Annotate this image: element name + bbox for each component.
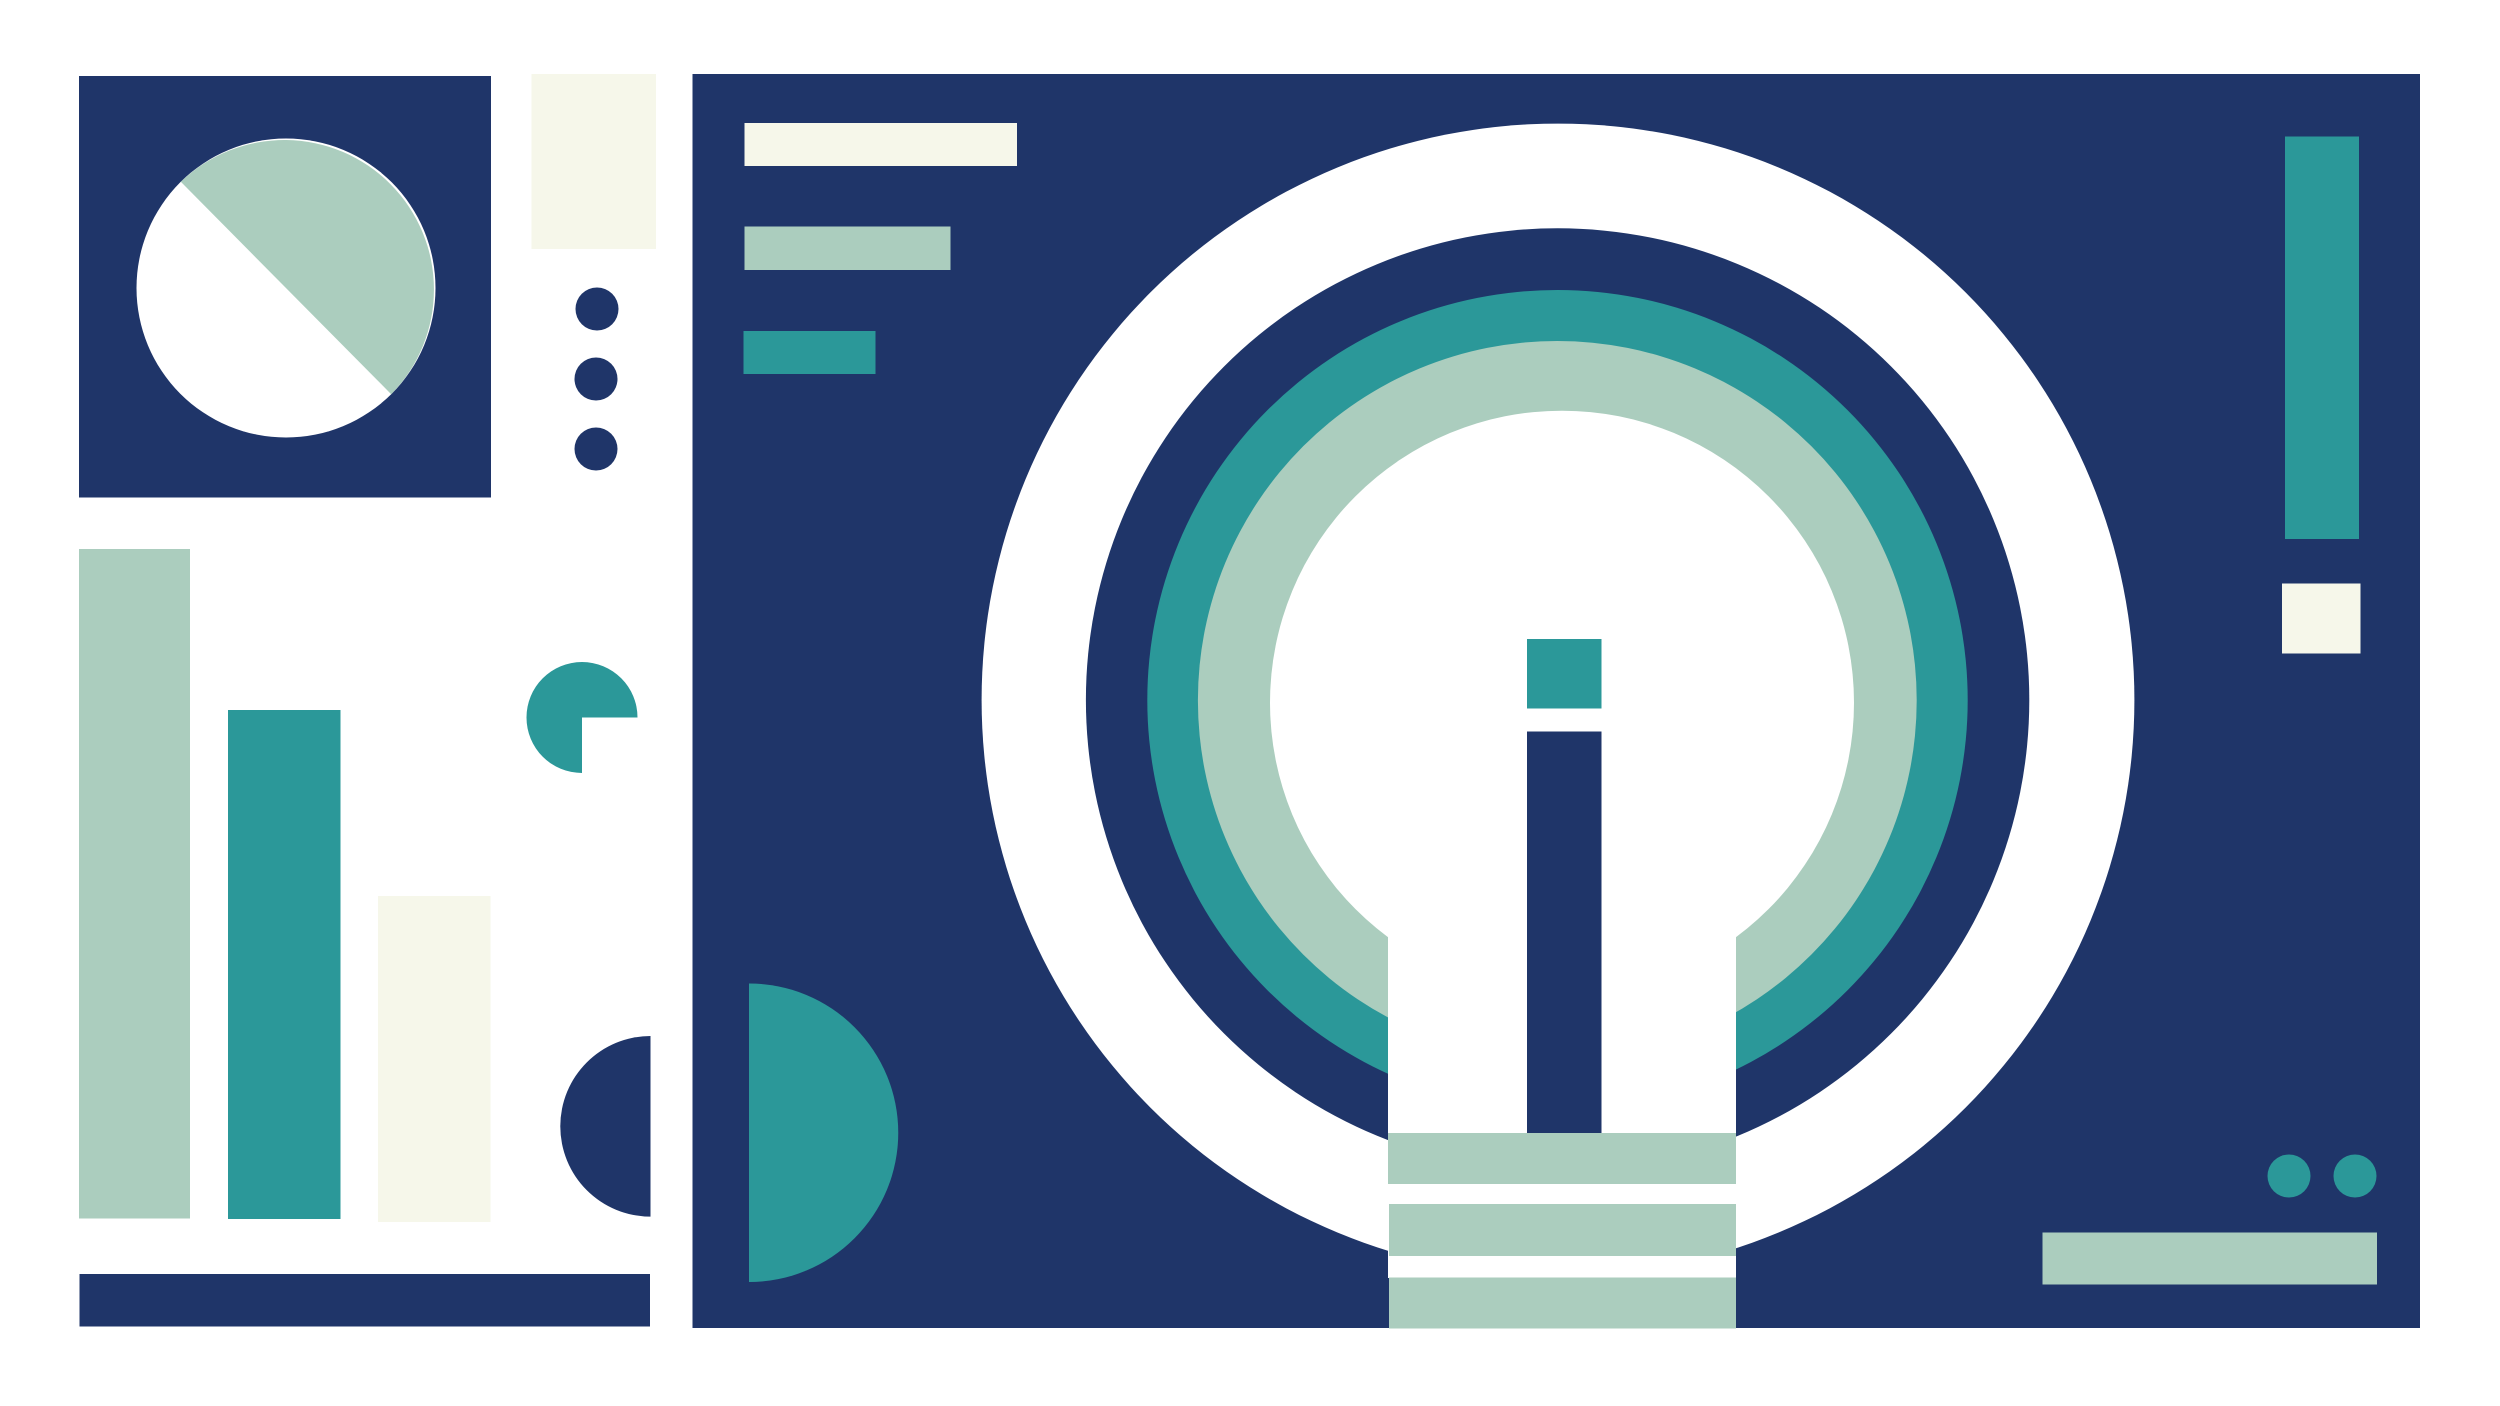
green rectangle bottom right xyxy=(2042,1232,2377,1284)
panel: navy square with split circle xyxy=(79,76,491,498)
circle white half xyxy=(136,138,436,438)
light bulb xyxy=(982,124,2134,1328)
filament dot xyxy=(1527,639,1602,708)
outer white ring xyxy=(982,124,2134,1276)
bar: green xyxy=(79,549,190,1218)
cream square xyxy=(2282,584,2360,654)
bulb base band 2 xyxy=(1389,1204,1736,1256)
filament stem xyxy=(1527,732,1602,1134)
bar: cream xyxy=(378,896,490,1222)
bulb base band 1 xyxy=(1388,1133,1736,1184)
bulb base band 3 xyxy=(1389,1278,1736,1328)
panel: main navy panel xyxy=(692,74,2420,1328)
cream legend bar xyxy=(744,123,1017,166)
white bulb neck xyxy=(1388,936,1736,1278)
teal ring xyxy=(1147,290,1968,1110)
green legend bar xyxy=(744,226,950,270)
navy ring xyxy=(1086,228,2029,1172)
white bulb glass xyxy=(1270,411,1854,995)
teal half circle xyxy=(749,984,898,1282)
square background xyxy=(79,76,491,498)
navy bar bottom left xyxy=(80,1274,650,1326)
panel background xyxy=(692,74,2420,1328)
icon: navy half circle xyxy=(560,1036,650,1217)
circle green half xyxy=(181,140,434,394)
green ring xyxy=(1198,341,1917,1060)
teal legend bar xyxy=(744,331,876,374)
bar chart xyxy=(79,549,490,1222)
teal vertical bar xyxy=(2285,136,2359,539)
icon: teal three-quarter circle xyxy=(526,662,638,773)
bar: teal xyxy=(228,710,340,1219)
three navy dots xyxy=(574,288,618,470)
two teal dots xyxy=(2268,1154,2376,1198)
cream rectangle top xyxy=(532,74,656,249)
